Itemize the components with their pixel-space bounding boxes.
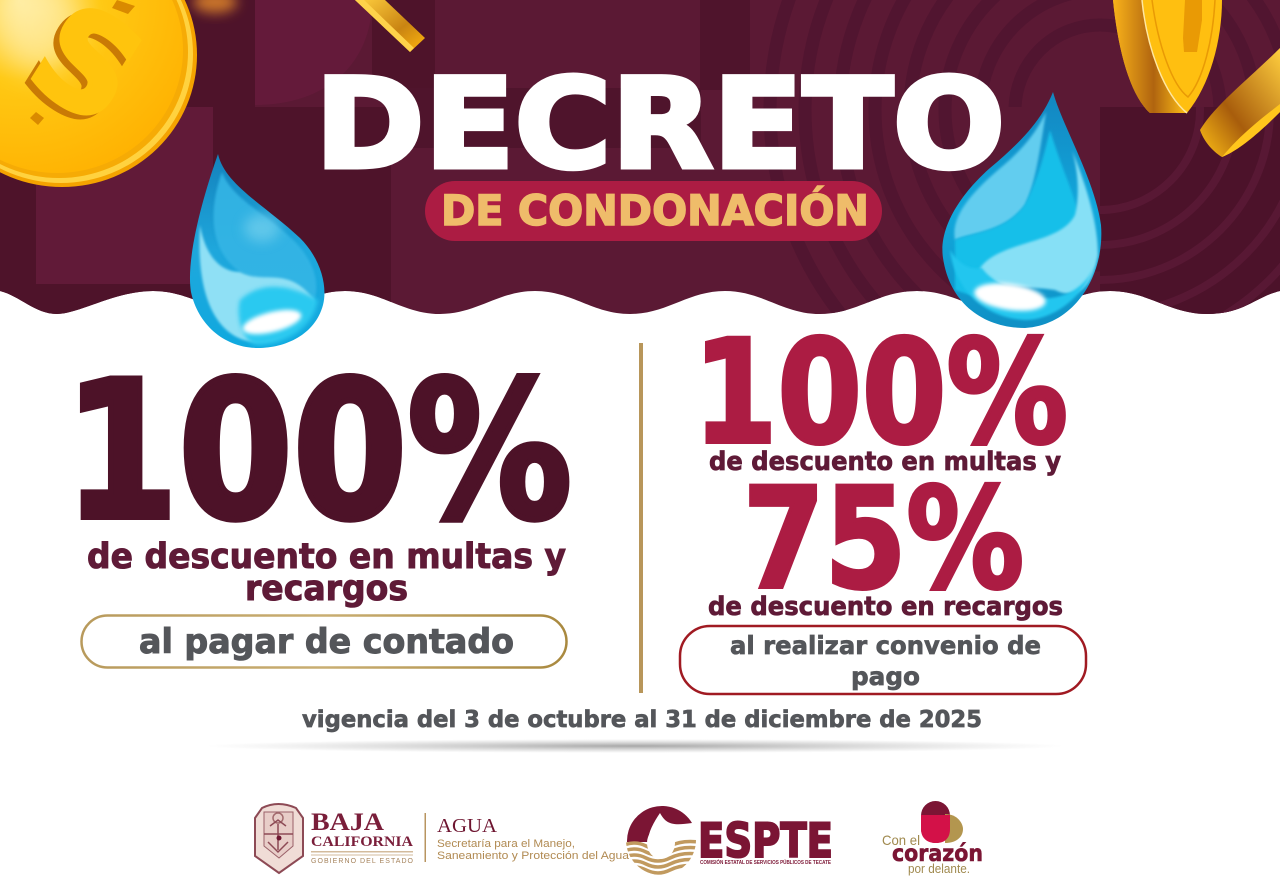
header: maroon wavy banner <box>0 0 1280 314</box>
logo: ESPTE <box>622 806 833 873</box>
logo: Con el corazón por delante <box>882 801 983 876</box>
subtitle pill: DE CONDONACIÓN <box>441 185 869 235</box>
icon: gold coin edge top centre <box>355 0 425 52</box>
shadow under validity text <box>205 739 1065 753</box>
logo: Con el corazón por delante: corazón <box>892 841 983 867</box>
right condition pill: pago <box>851 662 920 691</box>
right offer <box>680 309 1086 694</box>
logo: Secretaría del Agua: Secretaría para el Manejo, <box>437 838 575 850</box>
logo: Con el corazón por delante: Con el <box>882 832 920 848</box>
validity text: vigencia del 3 de octubre al 31 de diciembre de 2025 <box>302 707 982 733</box>
title: DECRETO <box>315 53 1005 197</box>
right 100 percent: 100% <box>693 309 1068 476</box>
logo: Con el corazón por delante: por delante. <box>908 861 970 876</box>
logo: ESPTE: COMISIÓN ESTATAL DE SERVICIOS PÚBLICOS DE TECATE <box>700 858 832 866</box>
icon: heart blobs <box>921 801 963 843</box>
icon: water drop right <box>935 88 1105 333</box>
right fines text: de descuento en multas y <box>709 447 1061 477</box>
left big percentage: 100% <box>64 341 572 562</box>
logo: Baja California: CALIFORNIA <box>311 834 413 850</box>
icon: state shield <box>255 804 303 873</box>
logo: Secretaría del Agua <box>424 813 630 862</box>
logo: Baja California: BAJA <box>311 809 384 836</box>
icon: gold coin right edge <box>1200 48 1280 157</box>
left condition pill: al pagar de contado <box>139 622 514 662</box>
left description <box>87 537 566 609</box>
left description: de descuento en multas y <box>87 537 566 577</box>
icon: water drop left <box>190 154 324 348</box>
left condition pill <box>82 616 566 668</box>
right surcharges text: de descuento en recargos <box>708 592 1063 622</box>
left description: recargos <box>245 569 408 609</box>
divider <box>639 343 643 693</box>
icon: ESPTE C with waves <box>622 806 698 873</box>
right condition pill <box>680 626 1086 694</box>
logo: ESPTE: ESPTE <box>698 814 833 869</box>
icon: large gold coin top left <box>0 0 237 187</box>
right 75 percent: 75% <box>743 458 1024 620</box>
icon: gold coin top right <box>1113 0 1222 113</box>
logo: Secretaría del Agua: AGUA <box>437 815 498 837</box>
right condition pill: al realizar convenio de <box>730 631 1041 660</box>
logo: Baja California <box>255 804 414 873</box>
logo: Secretaría del Agua: Saneamiento y Protección del Agua <box>437 850 630 862</box>
logo: Baja California: GOBIERNO DEL ESTADO <box>311 858 414 865</box>
left offer <box>64 341 572 668</box>
